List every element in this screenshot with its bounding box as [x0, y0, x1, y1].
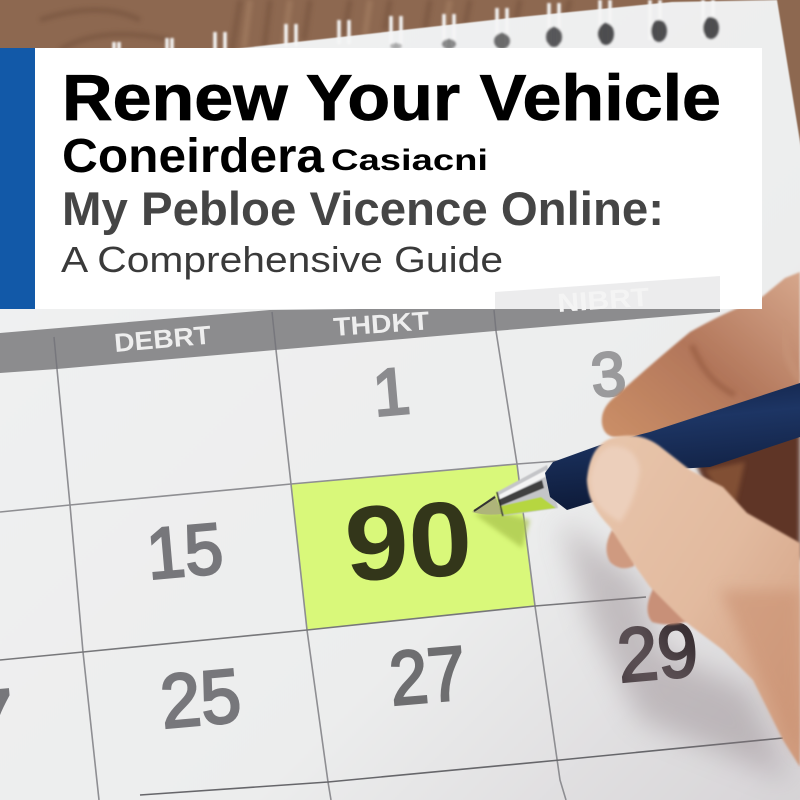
title line 1: Renew Your Vehicle [62, 61, 721, 134]
pen shadow [474, 512, 530, 548]
knuckle crease [692, 345, 735, 395]
lower palm tone [720, 590, 800, 760]
middle finger [606, 530, 640, 568]
pen chrome collar [497, 465, 558, 516]
title panel [0, 48, 762, 309]
palm shadow area [690, 420, 800, 560]
weekday label: DEBRT: DEBRT [113, 320, 212, 358]
pen barrel [545, 383, 800, 510]
title line 2 large: Coneirdera [62, 130, 324, 183]
subtitle: A Comprehensive Guide [61, 239, 503, 280]
date 3: 3 [588, 339, 629, 411]
faded weekday label: NIBRT: NIBRT [556, 282, 650, 318]
index finger [602, 272, 800, 440]
date 25: 25 [157, 653, 244, 745]
thumb and back of hand [587, 436, 800, 767]
faded weekday band [495, 276, 720, 309]
title line 3: My Pebloe Vicence Online: [62, 182, 664, 235]
finger fold [784, 320, 800, 380]
date 90 highlighted: 90 [342, 479, 475, 604]
blue accent bar [0, 48, 35, 309]
hand and pen illustration [472, 272, 800, 767]
highlighted date cell [291, 464, 535, 630]
white panel background [35, 48, 762, 309]
thumbnail [590, 446, 640, 522]
date 15: 15 [143, 509, 226, 595]
palm warm tone [705, 462, 745, 505]
title line 2 small: Casiacni [331, 144, 488, 177]
weekday label: THDKT: THDKT [332, 305, 430, 342]
hand shadow on calendar [560, 520, 790, 780]
ring finger [647, 587, 690, 625]
date 1: 1 [370, 353, 413, 430]
calendar grid lines [0, 331, 783, 800]
date 29: 29 [614, 607, 701, 699]
pen nib cone [472, 495, 502, 515]
calendar header band [0, 305, 720, 373]
calendar dates [0, 339, 701, 762]
spiral binding rings [114, 0, 719, 50]
date 27: 27 [386, 631, 469, 722]
